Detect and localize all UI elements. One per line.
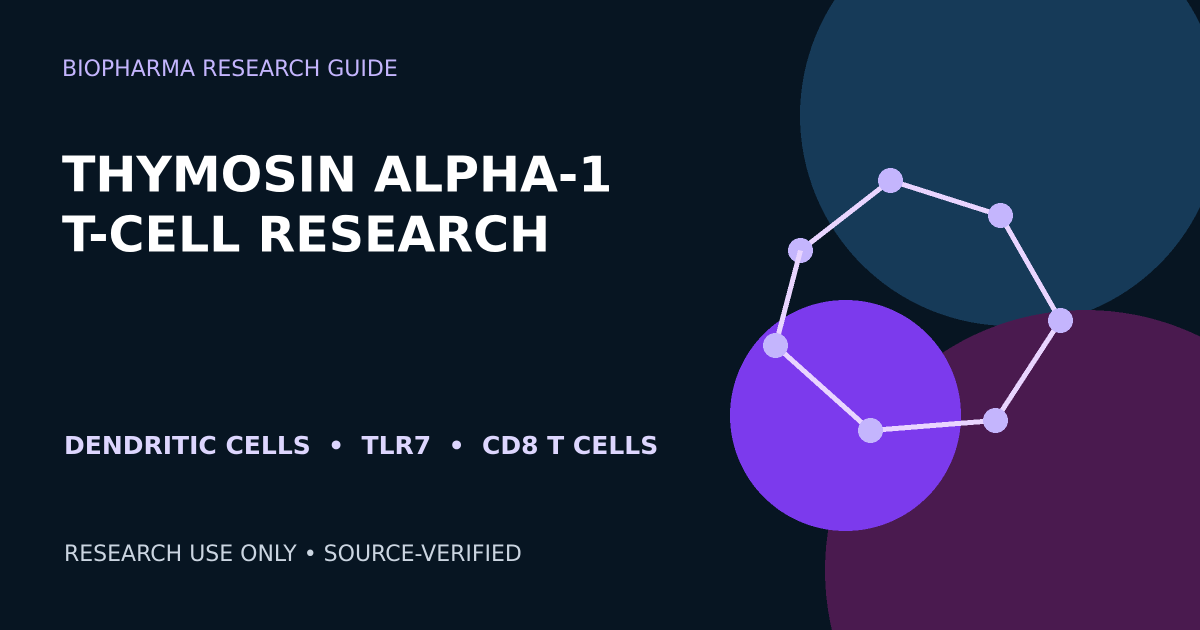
peptide chain diagram — [763, 168, 1073, 443]
blue background circle — [800, 0, 1200, 326]
eyebrow label: BIOPHARMA RESEARCH GUIDE — [62, 57, 398, 82]
key topics: DENDRITIC CELLS • TLR7 • CD8 T CELLS — [64, 431, 658, 460]
maroon background circle — [825, 310, 1200, 630]
title: T-CELL RESEARCH — [62, 206, 550, 264]
footer note: RESEARCH USE ONLY • SOURCE-VERIFIED — [64, 542, 522, 567]
title — [62, 146, 612, 264]
violet circle — [730, 300, 961, 531]
title: THYMOSIN ALPHA-1 — [62, 146, 612, 204]
